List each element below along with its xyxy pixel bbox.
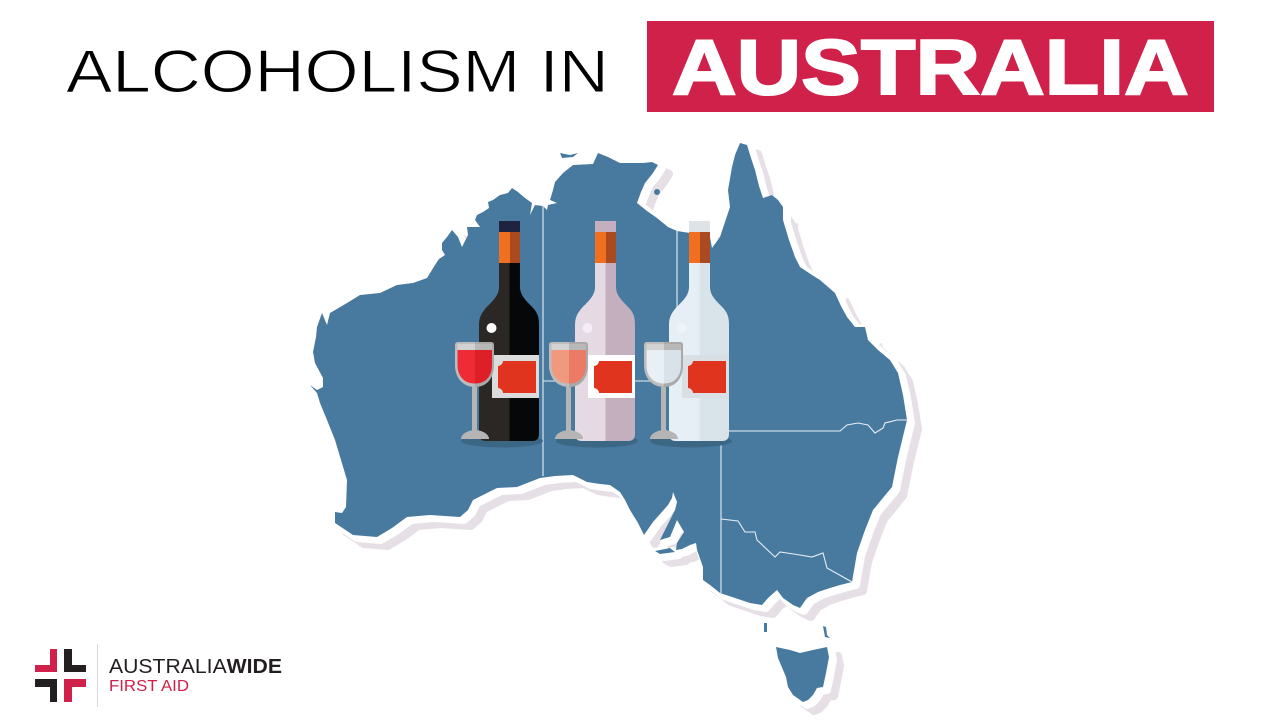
bottle body: [669, 263, 700, 441]
bottle group: white wine: [644, 221, 732, 448]
map of australia: [310, 143, 907, 702]
cap and foil: [499, 221, 520, 232]
map shadow: [321, 152, 918, 711]
title: alcoholism in: ALCOHOLISM IN: [66, 37, 609, 105]
bottle group: rose wine: [549, 221, 638, 448]
shadow: [556, 434, 638, 448]
wine glass: [455, 342, 494, 439]
logo subtitle: FIRST AID: [109, 678, 189, 695]
logo: australia wide first aid: [35, 644, 282, 707]
landmass: [310, 143, 907, 702]
label: [492, 355, 539, 398]
wine glass: [644, 342, 683, 439]
shadow: [461, 434, 543, 448]
bottle body: [479, 263, 510, 441]
cap and foil: [595, 221, 616, 232]
icon: cross mark: [35, 649, 86, 702]
state borders: [543, 206, 907, 593]
title banner: australia: AUSTRALIA: [672, 23, 1189, 111]
map white outline: [314, 146, 911, 705]
label: [682, 355, 729, 398]
shadow: [650, 434, 732, 448]
cap and foil: [689, 221, 710, 232]
logo wordmark: AUSTRALIAWIDE: [109, 655, 282, 678]
label: [588, 355, 635, 398]
bottle group: red wine: [455, 221, 543, 448]
small islands: [560, 153, 830, 638]
bottle body: [575, 263, 606, 441]
wine glass: [549, 342, 588, 439]
